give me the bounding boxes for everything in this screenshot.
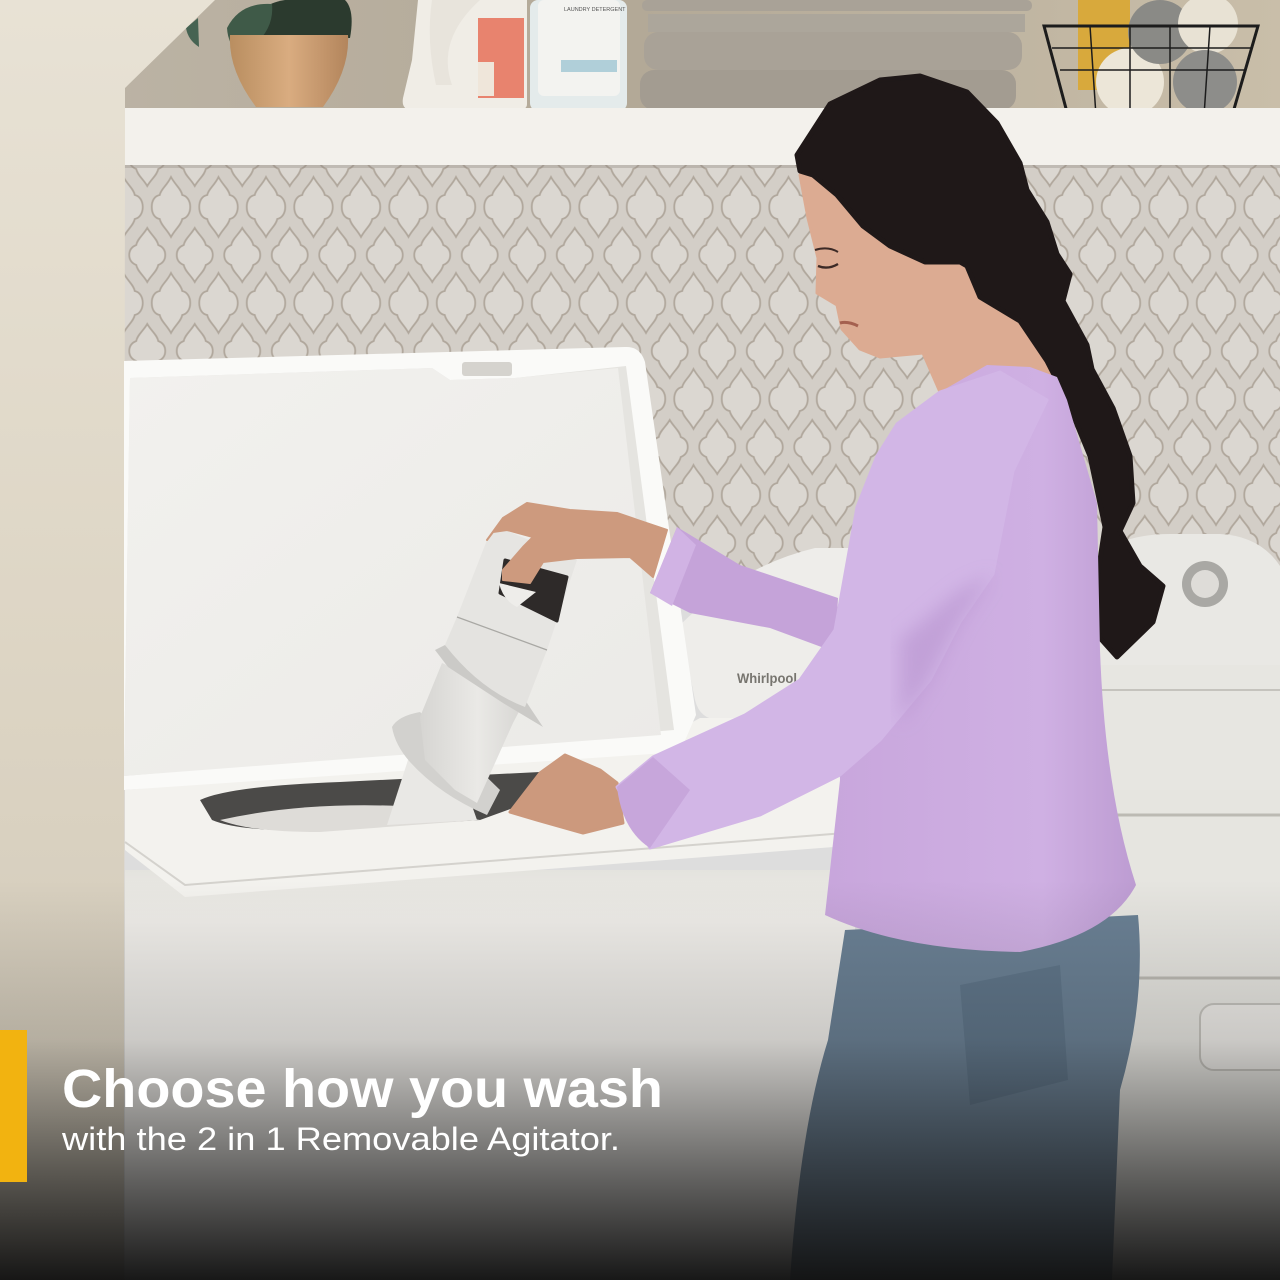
bottom dark gradient [0, 880, 1280, 1280]
tile backsplash [124, 165, 1280, 585]
lower flange [392, 712, 500, 815]
open lid [124, 347, 696, 790]
rear console [680, 548, 860, 720]
right washer [1090, 534, 1280, 1280]
folded towels [640, 0, 1032, 110]
drawer handle [1200, 1004, 1280, 1070]
cabinet body [125, 870, 855, 1280]
brand name: Whirlpool [737, 670, 797, 686]
plant in wooden pot [186, 0, 352, 107]
far sleeve with cuff [650, 527, 838, 652]
back wall above shelf [0, 0, 1280, 170]
hair and braid [797, 76, 1163, 657]
facial features [815, 248, 858, 326]
face and neck [800, 175, 1057, 392]
shelf items [186, 0, 1258, 116]
headline: Choose how you wash [62, 1059, 663, 1119]
upper flange [435, 645, 543, 727]
woman [617, 76, 1163, 1280]
caption [61, 1059, 663, 1157]
cabinet front [1090, 790, 1280, 1280]
detergent bottles [403, 0, 627, 111]
wire basket with yellow box and balls [1044, 0, 1258, 116]
jeans [790, 915, 1140, 1280]
deck top [125, 718, 860, 897]
left cream wall with diagonal [0, 0, 215, 1280]
raised hand gripping agitator [487, 503, 667, 583]
underarm shading [900, 574, 993, 725]
main washer [124, 347, 860, 1280]
lower stem [387, 745, 477, 825]
detergent label text: LAUNDRY DETERGENT [564, 7, 626, 13]
hand on washer lip [510, 755, 623, 833]
sweater torso [825, 365, 1136, 952]
mid cylinder [420, 663, 525, 803]
near sleeve with cuff [617, 372, 1047, 848]
removable agitator [387, 529, 577, 825]
console with knob [1090, 534, 1280, 690]
top and lid [1090, 665, 1280, 790]
drum opening [200, 772, 540, 830]
agitator handle [500, 560, 567, 621]
agitator top [457, 529, 577, 650]
white shelf [122, 108, 1280, 168]
yellow accent bar [0, 1030, 27, 1182]
subheading: with the 2 in 1 Removable Agitator. [61, 1121, 620, 1157]
